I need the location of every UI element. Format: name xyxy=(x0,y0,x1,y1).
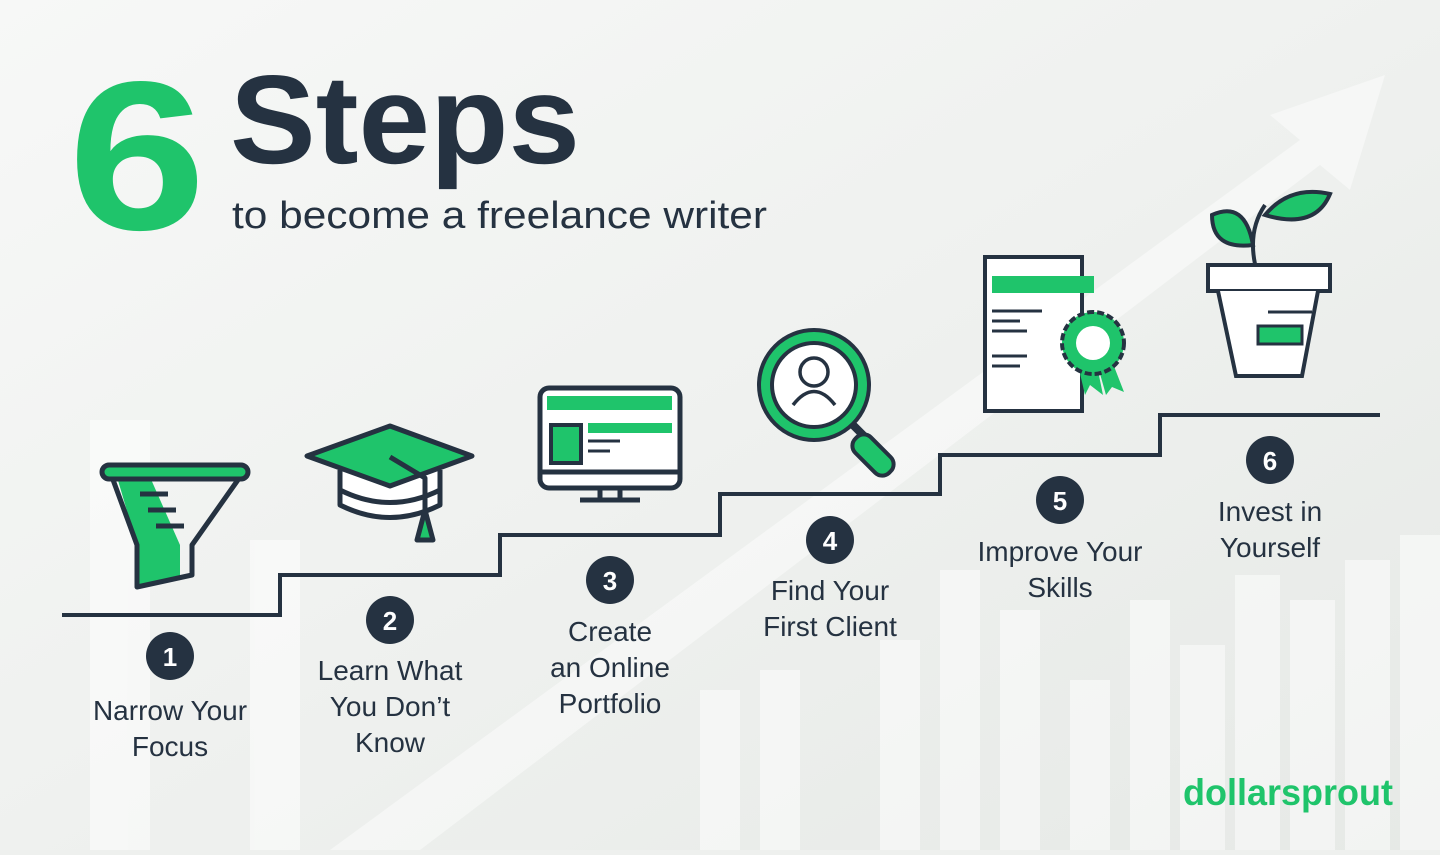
icon: certificate xyxy=(985,257,1124,411)
step 1 xyxy=(93,632,247,762)
icon: graduation cap xyxy=(307,426,472,540)
title: 6: 6 xyxy=(68,37,206,274)
step 2: 2 xyxy=(383,606,397,636)
icon: plant pot xyxy=(1208,192,1330,376)
step 6: 6 xyxy=(1263,446,1277,476)
icon: monitor xyxy=(540,388,680,500)
step 1: 1 xyxy=(163,642,177,672)
staircase xyxy=(62,415,1380,615)
step 4: 4 xyxy=(823,526,838,556)
step 5 xyxy=(978,476,1142,603)
step 3: Portfolio xyxy=(559,688,661,719)
icon: funnel xyxy=(102,465,248,587)
step 2: Learn What xyxy=(318,655,463,686)
step 6: Yourself xyxy=(1220,532,1320,563)
icon: magnifier xyxy=(759,330,898,480)
step 3: 3 xyxy=(603,566,617,596)
subtitle: to become a freelance writer xyxy=(232,195,767,237)
step 5: 5 xyxy=(1053,486,1067,516)
step 4: Find Your xyxy=(771,575,889,606)
step 3 xyxy=(550,556,670,719)
step 1: Focus xyxy=(132,731,208,762)
logo: dollarsprout xyxy=(1183,772,1393,813)
step 6: Invest in xyxy=(1218,496,1322,527)
step 3: Create xyxy=(568,616,652,647)
step 1: Narrow Your xyxy=(93,695,247,726)
step 6 xyxy=(1218,436,1322,563)
step 2: Know xyxy=(355,727,426,758)
title: Steps: Steps xyxy=(230,49,580,190)
step 5: Improve Your xyxy=(978,536,1142,567)
step 4 xyxy=(763,516,897,642)
step 4: First Client xyxy=(763,611,897,642)
step 5: Skills xyxy=(1027,572,1093,603)
step 3: an Online xyxy=(550,652,670,683)
step 2 xyxy=(318,596,463,758)
step 2: You Don’t xyxy=(330,691,450,722)
